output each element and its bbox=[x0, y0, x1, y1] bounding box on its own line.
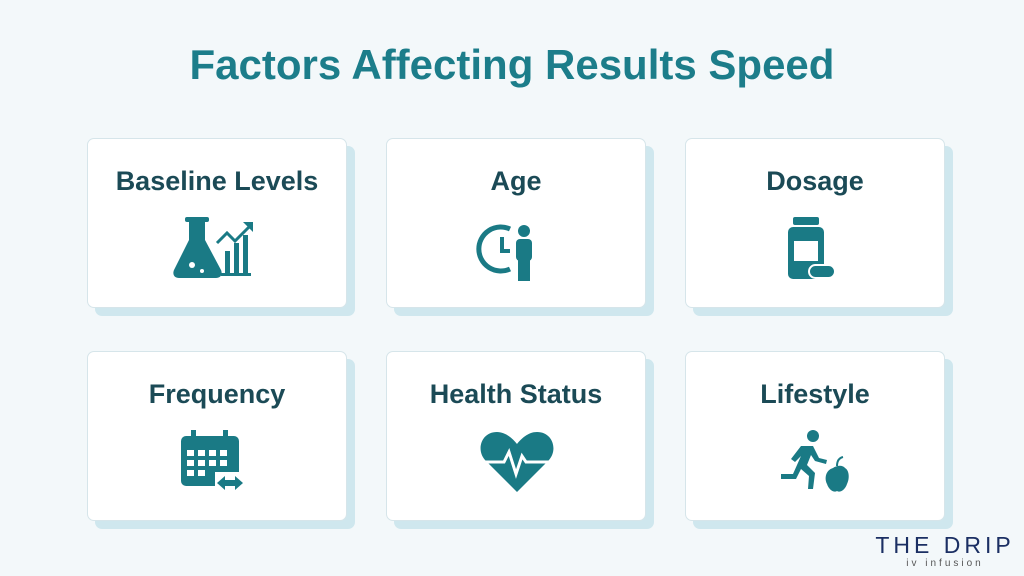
panel: health status bbox=[386, 351, 646, 521]
panel: lifestyle: Lifestyle bbox=[760, 379, 870, 409]
panel: lifestyle bbox=[685, 351, 945, 521]
title: Factors Affecting Results Speed bbox=[190, 41, 834, 88]
panel: baseline levels bbox=[87, 138, 347, 308]
icon: runner and apple bbox=[781, 430, 849, 492]
icon: flask and chart bbox=[173, 217, 253, 278]
panel: dosage bbox=[685, 138, 945, 308]
panel: baseline levels: Baseline Levels bbox=[116, 166, 318, 196]
logo: iv infusion bbox=[906, 558, 984, 569]
panel: frequency: Frequency bbox=[149, 379, 285, 409]
panel: age: Age bbox=[490, 166, 542, 196]
icon: calendar with arrows bbox=[181, 430, 243, 490]
panel: frequency bbox=[87, 351, 347, 521]
icon: clock and person bbox=[476, 224, 532, 281]
panel: dosage: Dosage bbox=[766, 166, 864, 196]
logo: THE DRIP bbox=[875, 532, 1015, 558]
panel: health status: Health Status bbox=[430, 379, 602, 409]
icon: pill bottle bbox=[788, 217, 834, 279]
panel: age bbox=[386, 138, 646, 308]
icon: heart with pulse bbox=[480, 432, 554, 492]
